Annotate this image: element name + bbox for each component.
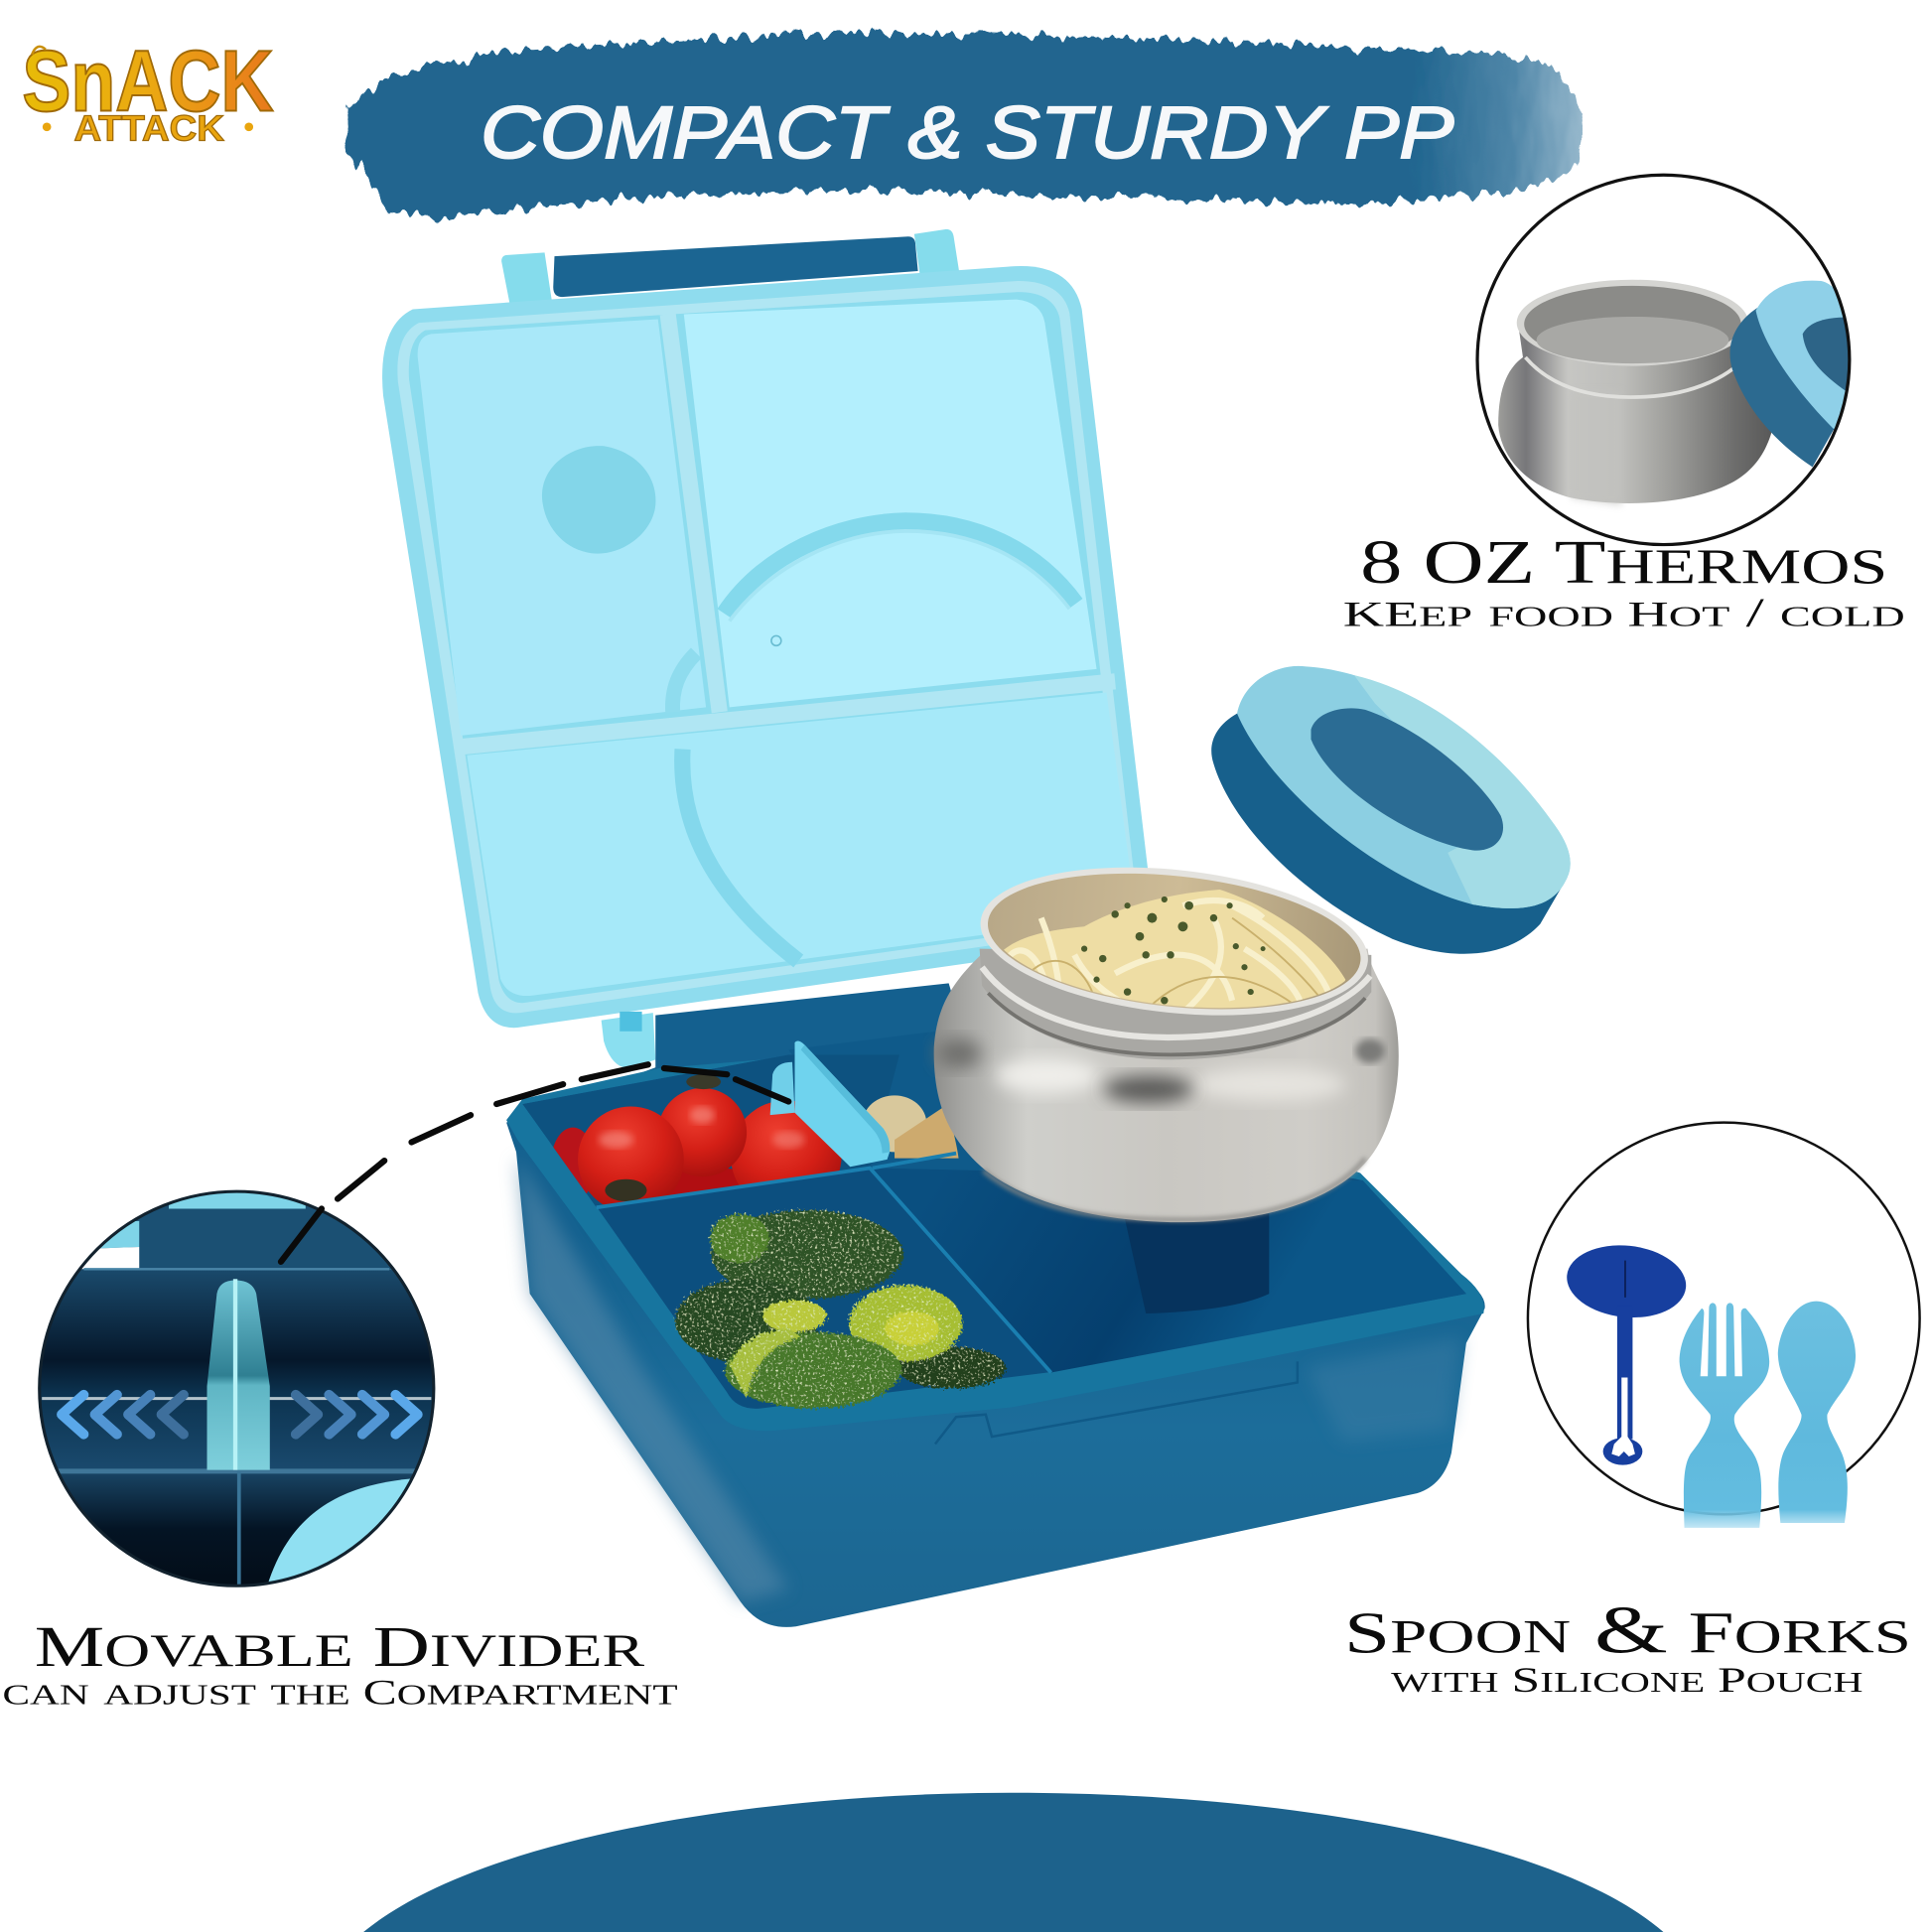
lid: centre button (1311, 708, 1503, 851)
lunch box (382, 229, 1485, 1627)
heading: 8 oz thermos: 8 OZ T hermos (1360, 521, 1887, 599)
detail: chevrons (62, 1395, 418, 1435)
lid: lighter segment (1354, 675, 1571, 908)
lid compartment: lower (467, 692, 1136, 996)
footer shape: blue ellipse (363, 1793, 1663, 1932)
circle outline (1477, 175, 1850, 545)
base: interior floor (526, 1067, 1466, 1409)
thermos shadow (1124, 1213, 1269, 1313)
herbs (1081, 897, 1266, 1004)
lid detail: round blob (542, 446, 655, 554)
thermos lid (1211, 666, 1571, 954)
movable divider in box (770, 1041, 890, 1167)
hinge: top of lid (501, 229, 960, 306)
back compartment behind the jar (788, 1026, 986, 1171)
subheading: with silicone pouch: with S ilicone P ouch (1391, 1656, 1863, 1701)
base: right highlight (1307, 1337, 1461, 1442)
base: rim (506, 1041, 1484, 1431)
logo: Snack Attack: ATTACK (73, 107, 224, 148)
thermos lid, clipped (1729, 280, 1849, 467)
base: outer body (506, 1067, 1485, 1627)
tomatoes (551, 1074, 842, 1212)
jar inner wall (981, 857, 1367, 1026)
circle outline (40, 1191, 434, 1586)
lid: light ring (1237, 666, 1571, 908)
base: side highlight (516, 1156, 788, 1601)
open lid, light blue (382, 266, 1156, 1067)
jar neck (980, 949, 1371, 1059)
heading: spoon and forks: Spoon & F orks (1344, 1591, 1911, 1667)
base: front clasp recess (935, 1361, 1298, 1445)
title text: COMPACT & STURDY PP (481, 91, 1454, 174)
lid ridges (462, 314, 1115, 747)
fork (1680, 1303, 1769, 1528)
detail: divider (207, 1280, 270, 1470)
broccoli (675, 1210, 1006, 1409)
circle: thermos detail (1477, 175, 1872, 545)
tomato compartment (522, 1054, 899, 1212)
circle: movable divider detail (37, 1190, 438, 1589)
logo: Snack Attack: SnACK (22, 34, 274, 130)
thermos jar, empty (1498, 280, 1777, 505)
base: back wall (655, 983, 973, 1084)
thermos jar with noodles (934, 850, 1399, 1222)
detail: lid corner (169, 1193, 306, 1209)
compartment ribs (597, 1154, 1051, 1373)
detail: light blue arc (268, 1479, 410, 1582)
subheading: can adjust the compartment: can adjust the C ompartment (2, 1668, 678, 1713)
large compartment (873, 1169, 1466, 1373)
noodles (1004, 890, 1346, 1009)
hinge tab: lower (602, 1013, 655, 1067)
jar reflections (936, 1038, 1385, 1220)
lid compartment: upper right (684, 300, 1097, 707)
jar body (934, 949, 1399, 1222)
silicone pouch (1564, 1240, 1690, 1465)
subheading: keep food hot / cold: KE ep food H ot / cold (1343, 590, 1905, 634)
detail: glass line (42, 1397, 431, 1400)
circle: utensils detail (1528, 1123, 1920, 1528)
title banner: brush stroke (345, 32, 1585, 216)
crackers (863, 1095, 959, 1159)
heading: movable divider: M ovable D ivider (35, 1607, 645, 1681)
spoon (1778, 1302, 1856, 1523)
lid detail: ridge arcs (672, 521, 1075, 961)
dashed callout arrow (281, 1064, 788, 1262)
lid compartment: upper left (418, 319, 706, 736)
